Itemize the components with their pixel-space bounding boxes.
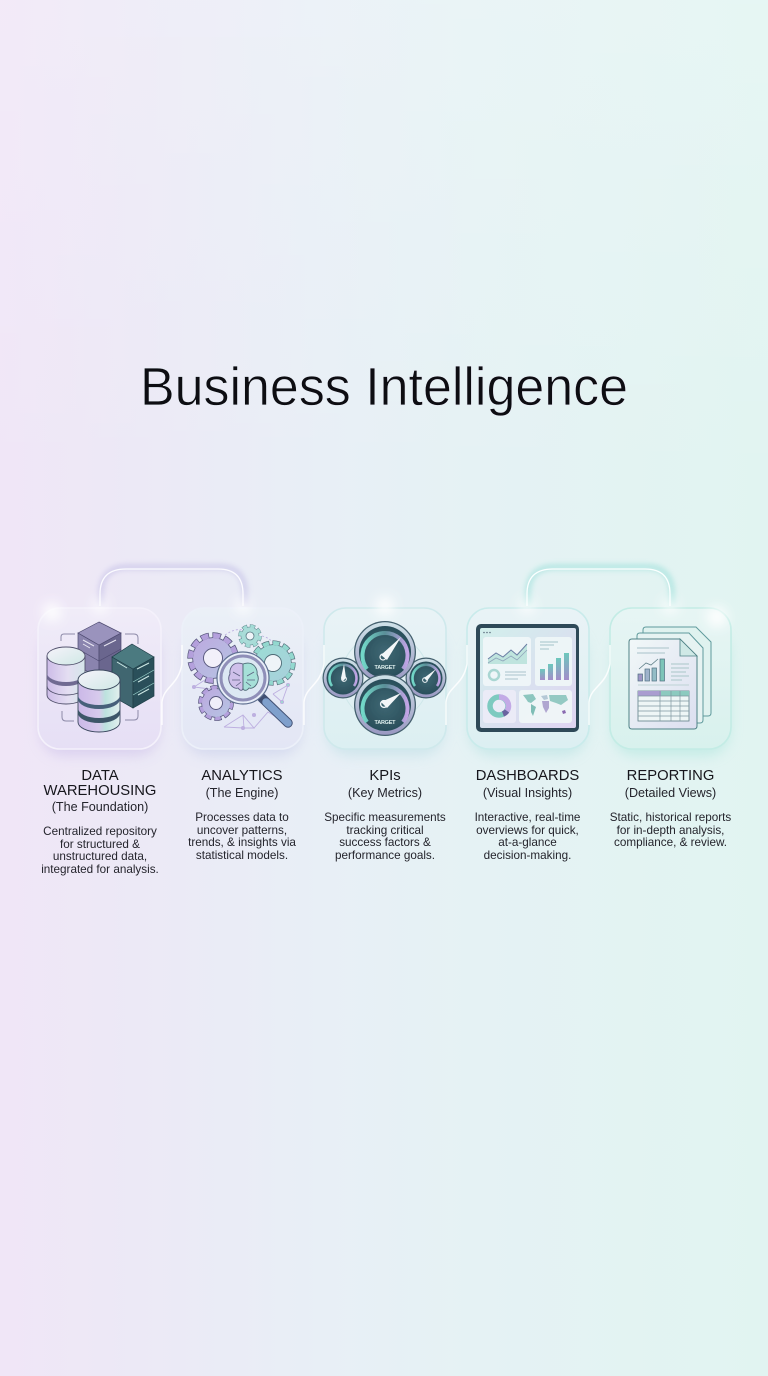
front page (629, 639, 697, 729)
text block: data warehousing: unstructured data, (53, 850, 147, 863)
text block: kpis: tracking critical (346, 824, 424, 837)
panel: kpis card (324, 608, 446, 749)
icon: reporting documents (629, 627, 711, 729)
table (638, 691, 689, 721)
text block: analytics: uncover patterns, (197, 824, 287, 837)
title: Business Intelligence (140, 357, 628, 417)
right gauge (406, 658, 446, 698)
left cylinder (47, 647, 85, 704)
magnifier lens and brain (217, 652, 269, 704)
text block: kpis (324, 768, 446, 862)
text block: kpis: performance goals. (335, 849, 435, 862)
text block: analytics: (The Engine) (206, 786, 278, 800)
world map card (519, 690, 572, 723)
donut card (483, 690, 516, 723)
text block: reporting: REPORTING (627, 768, 714, 784)
icon: data warehouse (47, 622, 154, 732)
panel: reporting card (610, 608, 731, 749)
text block: data warehousing: for structured & (60, 838, 140, 851)
icon: analytics gears and magnifier (190, 626, 293, 730)
text block: dashboards: Interactive, real-time (475, 811, 580, 824)
corner glints (43, 597, 727, 627)
text block: dashboards: (Visual Insights) (483, 786, 572, 800)
lower purple gear (200, 688, 232, 718)
text block: reporting: compliance, & review. (614, 836, 727, 849)
network lines (192, 630, 290, 730)
text block: analytics: ANALYTICS (201, 768, 283, 784)
bar chart card (535, 637, 572, 686)
front cylinder (78, 670, 120, 732)
text block: data warehousing (41, 768, 159, 876)
text block: data warehousing: WAREHOUSING (44, 783, 156, 799)
panel: analytics card (182, 608, 303, 749)
text block: data warehousing: integrated for analysis. (41, 863, 159, 876)
teal server stack (112, 644, 154, 708)
text block: analytics: trends, & insights via (188, 836, 296, 849)
magnifier handle (262, 698, 288, 723)
s-curve links between panels (162, 645, 610, 725)
text block: analytics (188, 768, 296, 862)
left gauge (322, 658, 364, 698)
panel: dashboards card (467, 608, 589, 749)
text block: dashboards: at-a-glance (498, 836, 557, 849)
connector: dashboards to reporting (527, 567, 672, 606)
text block: reporting: (Detailed Views) (625, 786, 716, 800)
text block: kpis: (Key Metrics) (348, 786, 422, 800)
teal gear (253, 643, 293, 683)
bottom gauge: TARGET (374, 720, 396, 726)
text block: analytics: statistical models. (196, 849, 288, 862)
text block: data warehousing: Centralized repository (43, 825, 157, 838)
text block: analytics: Processes data to (195, 811, 289, 824)
mini bar chart (638, 659, 664, 681)
text block: kpis: success factors & (339, 836, 431, 849)
text block: kpis: KPIs (369, 768, 401, 784)
line chart card (483, 637, 531, 686)
text block: dashboards (475, 768, 580, 862)
text block: reporting: for in-depth analysis, (617, 824, 724, 837)
text block: reporting: Static, historical reports (610, 811, 731, 824)
text block: data warehousing: DATA (81, 768, 119, 784)
text block: dashboards: DASHBOARDS (476, 768, 579, 784)
purple server stack (78, 622, 121, 678)
text block: reporting (610, 768, 731, 849)
large purple gear (190, 636, 236, 680)
text block: data warehousing: (The Foundation) (52, 800, 148, 814)
top gauge: TARGET (374, 665, 396, 671)
panel glow shadows (40, 630, 730, 756)
text block: kpis: Specific measurements (324, 811, 446, 824)
text block: dashboards: decision-making. (484, 849, 571, 862)
icon: dashboard tablet (476, 624, 579, 732)
icon: kpi gauges (322, 621, 446, 736)
small top gear (240, 626, 260, 646)
connector: data warehousing to analytics (100, 567, 245, 606)
text block: dashboards: overviews for quick, (476, 824, 579, 837)
panel: data warehousing card (38, 608, 161, 749)
